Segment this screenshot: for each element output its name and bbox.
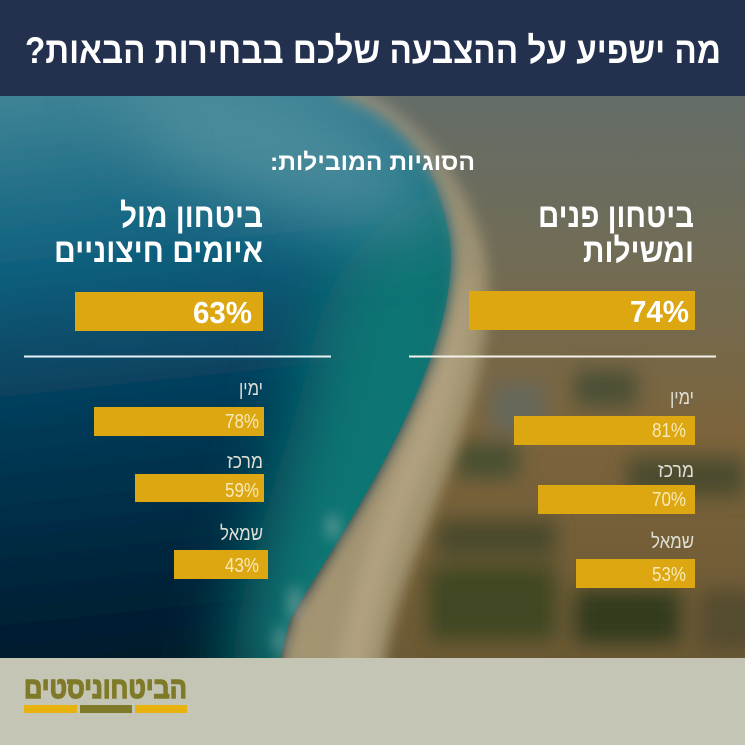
main bar 63%: 63% xyxy=(193,295,252,330)
panel: external threats xyxy=(24,197,331,579)
panel: internal security and governance xyxy=(409,197,716,588)
heading: external threats xyxy=(54,197,263,270)
left-wing bar 43%: 43% xyxy=(225,555,259,577)
right-wing bar 78% xyxy=(94,378,264,436)
header band xyxy=(0,0,745,96)
left-wing bar 43% xyxy=(174,523,268,579)
heading: external threats: ביטחון מול xyxy=(120,197,263,235)
footer band xyxy=(0,658,745,745)
heading: external threats: איומים חיצוניים xyxy=(54,232,263,270)
right-wing bar 78%: 78% xyxy=(225,411,259,433)
right-wing bar 81%: 81% xyxy=(652,420,686,442)
center bar 70%: 70% xyxy=(652,489,686,511)
left-wing bar 53% xyxy=(576,531,695,588)
left-wing bar 43%: שמאל xyxy=(220,523,263,545)
center bar 59%: 59% xyxy=(225,480,259,502)
right-wing bar 78%: ימין xyxy=(239,378,263,400)
main bar 74% xyxy=(469,291,695,330)
left-wing bar 53%: 53% xyxy=(652,564,686,586)
left-wing bar 53%: שמאל xyxy=(651,531,694,553)
heading: internal security xyxy=(538,197,694,270)
center bar 70% xyxy=(538,460,695,514)
subtitle: leading issues: הסוגיות המובילות: xyxy=(270,149,475,176)
center bar 59%: מרכז xyxy=(227,451,263,473)
main bar 74%: 74% xyxy=(630,294,689,329)
heading: internal security: ומשילות xyxy=(583,232,694,270)
main bar 63% xyxy=(75,292,263,331)
right-wing bar 81%: ימין xyxy=(670,387,694,409)
center bar 70%: מרכז xyxy=(658,460,694,482)
logo: הביטחוניסטים xyxy=(24,672,187,705)
background: blurred aerial coastline photo xyxy=(0,96,745,658)
heading: internal security: ביטחון פנים xyxy=(538,197,694,235)
center bar 59% xyxy=(135,451,264,502)
right-wing bar 81% xyxy=(514,387,695,445)
